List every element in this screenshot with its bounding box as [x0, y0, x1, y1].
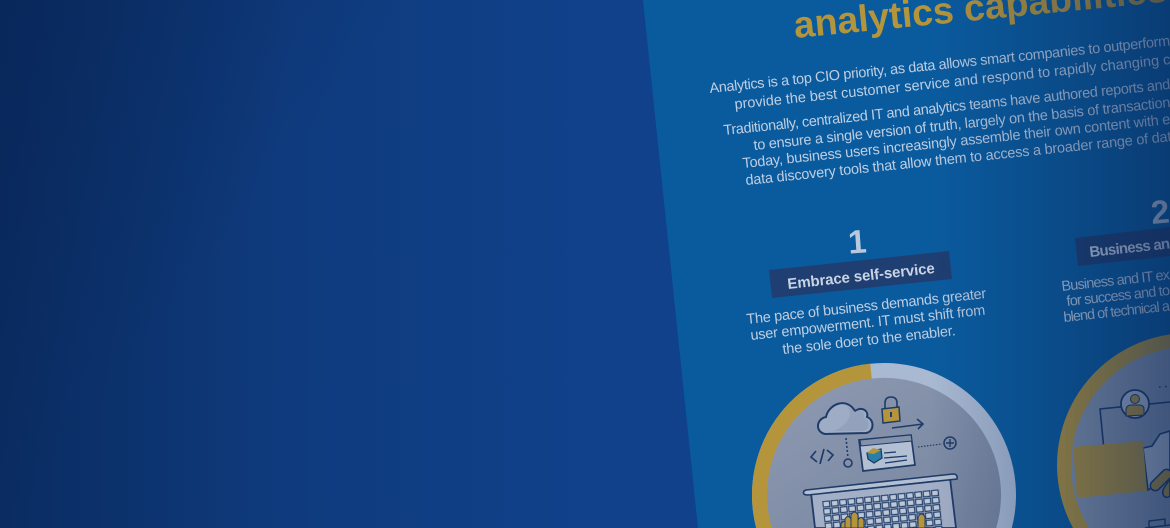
text block: intro: to ensure a single version of truth, largely on the basis of transaction — [753, 95, 1170, 154]
icon: handshake — [1073, 431, 1170, 498]
fingers — [841, 512, 925, 528]
heading bar — [769, 251, 952, 298]
panel: tilted infographic page — [643, 0, 1170, 528]
column 2: business and IT — [1057, 193, 1170, 528]
heading bar: Embrace self-service — [787, 260, 936, 293]
icon: code brackets — [811, 449, 833, 464]
description: The pace of business demands greater — [746, 286, 987, 328]
description: for success and to — [1066, 283, 1170, 310]
description: blend of technical a — [1063, 298, 1170, 326]
description: user empowerment. IT must shift from — [750, 303, 986, 344]
icon: padlock — [882, 397, 900, 423]
ring chart — [752, 363, 1016, 528]
page shading — [930, 0, 1170, 528]
icon: plus node — [918, 437, 956, 449]
icon: dots — [1159, 386, 1167, 388]
text block: intro: provide the best customer service and respond to rapidly changing c — [734, 52, 1170, 113]
heading bar — [1075, 227, 1170, 266]
heading bar: Business an — [1089, 235, 1170, 261]
text block: intro: data discovery tools that allow them to access a broader range of dat — [745, 129, 1170, 189]
icon: person — [1121, 390, 1149, 418]
text block: intro: Traditionally, centralized IT and analytics teams have authored reports and — [723, 77, 1170, 139]
number 1: 1 — [847, 222, 868, 261]
description: the sole doer to the enabler. — [782, 323, 956, 358]
icon: briefcase — [1145, 519, 1170, 528]
description — [746, 286, 987, 358]
icon: cloud — [818, 403, 873, 434]
icon: app window — [859, 435, 915, 471]
description: Business and IT ex — [1061, 267, 1170, 295]
ring chart — [1057, 334, 1170, 528]
icon: dotted connector — [844, 438, 852, 467]
icon: connector frame — [1100, 402, 1170, 445]
keyboard — [822, 489, 943, 528]
icon: arrow — [892, 419, 923, 429]
description — [1061, 267, 1170, 326]
text block: intro: Analytics is a top CIO priority, as data allows smart companies to outperform — [709, 33, 1170, 97]
text block: intro — [709, 33, 1170, 189]
text block: intro: Today, business users increasingly assemble their own content with e — [742, 112, 1170, 172]
icon: laptop — [804, 474, 957, 528]
column 1: embrace self-service — [746, 222, 1016, 528]
